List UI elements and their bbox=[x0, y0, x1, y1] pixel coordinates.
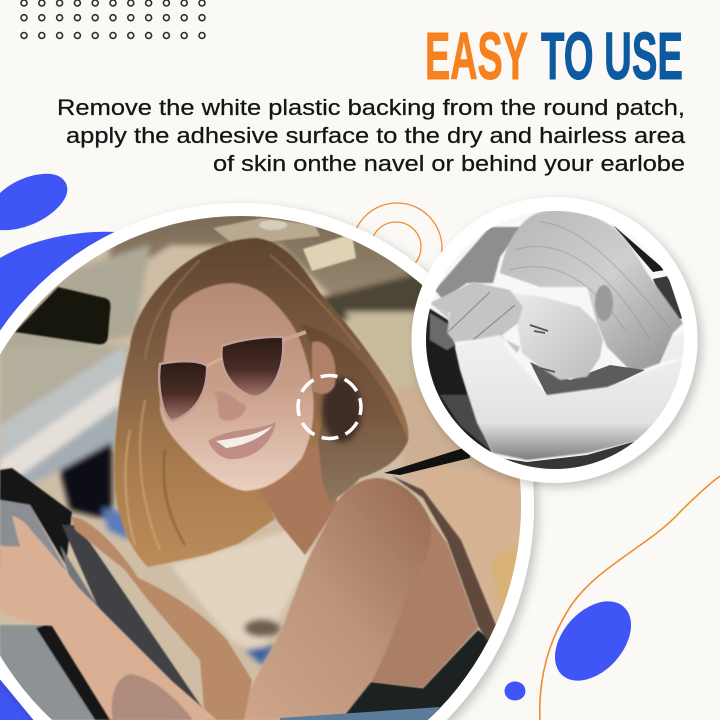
steering wheel bbox=[0, 468, 205, 720]
hair right lock bbox=[300, 325, 408, 503]
sunglasses bbox=[159, 332, 306, 421]
ear bbox=[312, 342, 336, 394]
hair strands bbox=[510, 222, 670, 340]
hand bbox=[430, 282, 523, 353]
bottom dark bbox=[500, 440, 640, 471]
shoulder and arm bbox=[234, 478, 431, 720]
far hand and forearm bbox=[71, 517, 252, 720]
main photo: woman driving bbox=[0, 210, 525, 720]
dot grid decoration bbox=[21, 0, 205, 38]
instructions text: of skin onthe navel or behind your earlobe bbox=[213, 151, 685, 176]
tank top bbox=[345, 629, 490, 718]
ear bbox=[595, 285, 613, 321]
sheer strap bbox=[392, 476, 496, 642]
car door bottom bbox=[280, 707, 440, 720]
nose bbox=[214, 391, 246, 420]
arm bbox=[455, 335, 686, 460]
hair back bbox=[114, 238, 408, 567]
near hand and forearm bbox=[0, 516, 217, 720]
seat dark bbox=[426, 303, 493, 453]
inset photo ring bbox=[412, 197, 698, 483]
car interior background bbox=[0, 212, 525, 665]
hair strands bbox=[125, 255, 360, 550]
dashed circle target bbox=[298, 376, 361, 438]
main photo ring bbox=[0, 203, 534, 720]
blue blobs left bbox=[0, 174, 116, 720]
eye and lips bbox=[530, 325, 555, 372]
shirt white bbox=[660, 334, 684, 363]
dark hair behind ear bbox=[322, 378, 362, 442]
dark upper right bbox=[613, 225, 682, 325]
face bbox=[160, 283, 314, 491]
neck bbox=[258, 440, 338, 555]
orange concentric arcs bbox=[352, 203, 442, 293]
instructions text: apply the adhesive surface to the dry and hairless area bbox=[66, 123, 686, 148]
face bbox=[513, 293, 603, 380]
forearm shadow bbox=[112, 674, 193, 720]
rock background bbox=[435, 227, 522, 300]
inset photo: tired woman bbox=[424, 209, 686, 471]
car visors bbox=[213, 218, 356, 271]
torso bbox=[365, 505, 478, 688]
orange curve and blue shapes bottom right bbox=[504, 476, 720, 720]
instructions text bbox=[57, 95, 686, 176]
instructions text: Remove the white plastic backing from the round patch, bbox=[57, 95, 685, 120]
hair bbox=[500, 210, 683, 373]
rear view mirror bbox=[15, 287, 110, 344]
finger lines bbox=[447, 292, 515, 340]
dark top bbox=[530, 362, 645, 396]
title: EASY bbox=[425, 19, 528, 94]
belt strap bbox=[384, 446, 470, 475]
mouth bbox=[208, 422, 276, 459]
